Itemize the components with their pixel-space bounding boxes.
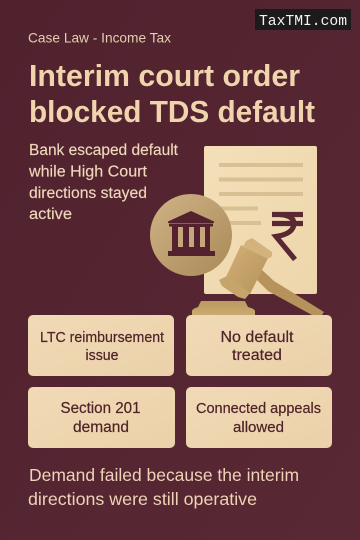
- conclusion text: directions were still operative: [28, 489, 257, 509]
- subtitle: Bank escaped default: [29, 142, 179, 159]
- icon: gavel: [192, 238, 324, 315]
- category label: Case Law - Income Tax: [28, 30, 171, 46]
- card: Section 201 demand: demand: [73, 419, 129, 436]
- icon: bank seal: [150, 194, 232, 276]
- card: Connected appeals allowed: Connected appeals: [196, 401, 321, 417]
- card: Section 201 demand: Section 201: [60, 400, 140, 417]
- card: No default treated: treated: [232, 347, 282, 364]
- gavel head caps: [243, 238, 272, 259]
- subtitle: directions stayed: [29, 185, 147, 202]
- card: No default treated: No default: [220, 329, 294, 346]
- icon: document: [204, 146, 317, 294]
- watermark: TaxTMI.com: TaxTMI.com: [259, 14, 347, 30]
- subtitle: while High Court: [28, 164, 148, 180]
- gavel handle: [257, 270, 324, 315]
- title: [29, 58, 315, 129]
- icon: rupee sign: [272, 214, 303, 260]
- card: LTC reimbursement issue: [28, 315, 174, 376]
- card: LTC reimbursement issue: LTC reimbursement: [40, 330, 164, 346]
- conclusion text: Demand failed because the interim: [29, 465, 299, 485]
- subtitle: active: [29, 206, 72, 223]
- card: Section 201 demand: [28, 387, 175, 448]
- gavel head body: [226, 245, 268, 294]
- card: LTC reimbursement issue: issue: [86, 348, 118, 364]
- illustration: document with rupee, bank seal and gavel: [150, 146, 324, 315]
- subtitle: [28, 142, 179, 223]
- card: No default treated: [186, 315, 332, 376]
- title: Interim court order: [29, 58, 300, 93]
- conclusion text: [28, 465, 299, 509]
- card: Connected appeals allowed: allowed: [233, 420, 284, 436]
- card: Connected appeals allowed: [186, 387, 332, 448]
- title: blocked TDS default: [29, 94, 315, 129]
- watermark: TaxTMI.com: [255, 9, 351, 30]
- gavel base: [192, 301, 255, 315]
